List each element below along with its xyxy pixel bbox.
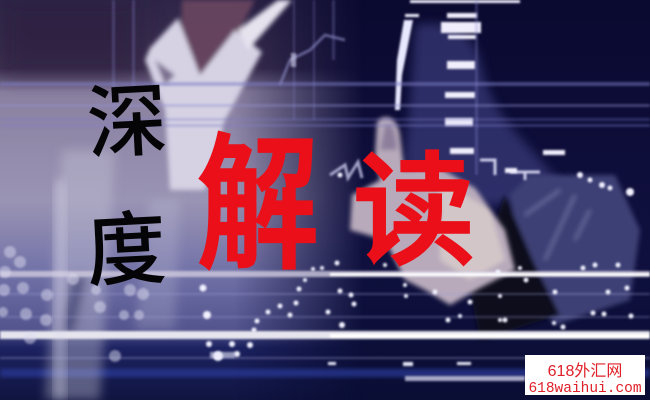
heading character 深: 深 bbox=[85, 76, 169, 169]
heading: 深度 bbox=[84, 76, 169, 297]
businessman: silhouette of head and shoulders on chart bbox=[400, 23, 575, 210]
heading: 解读 bbox=[197, 123, 475, 288]
businessman: left sleeve light column bbox=[45, 150, 180, 400]
pointing hand bbox=[350, 117, 515, 305]
horizontal light streaks bbox=[0, 82, 650, 381]
data readout bright bars bbox=[405, 0, 565, 173]
heading character 读: 读 bbox=[353, 144, 475, 280]
heading character 解: 解 bbox=[197, 123, 319, 288]
vertical light column bbox=[55, 180, 65, 400]
watermark line 1: 618外汇网 bbox=[548, 362, 622, 380]
top-left dark haze bbox=[0, 0, 140, 75]
businessman: dark sleeve bbox=[470, 175, 640, 340]
stock candlestick chart line bbox=[280, 20, 540, 180]
watermark line 2: 618waihui.com bbox=[528, 381, 642, 397]
watermark box bbox=[525, 355, 645, 397]
background: hazy purple left side bbox=[0, 0, 356, 400]
bokeh lights left bbox=[0, 246, 149, 362]
bokeh lights middle and right bbox=[200, 172, 642, 365]
lower blue band bbox=[0, 369, 650, 377]
heading character 度: 度 bbox=[84, 204, 169, 297]
businessman: shirt collar and tie bbox=[145, 0, 292, 190]
vertical light streaks bbox=[112, 0, 478, 175]
small bright dashes in lower band bbox=[210, 352, 471, 366]
